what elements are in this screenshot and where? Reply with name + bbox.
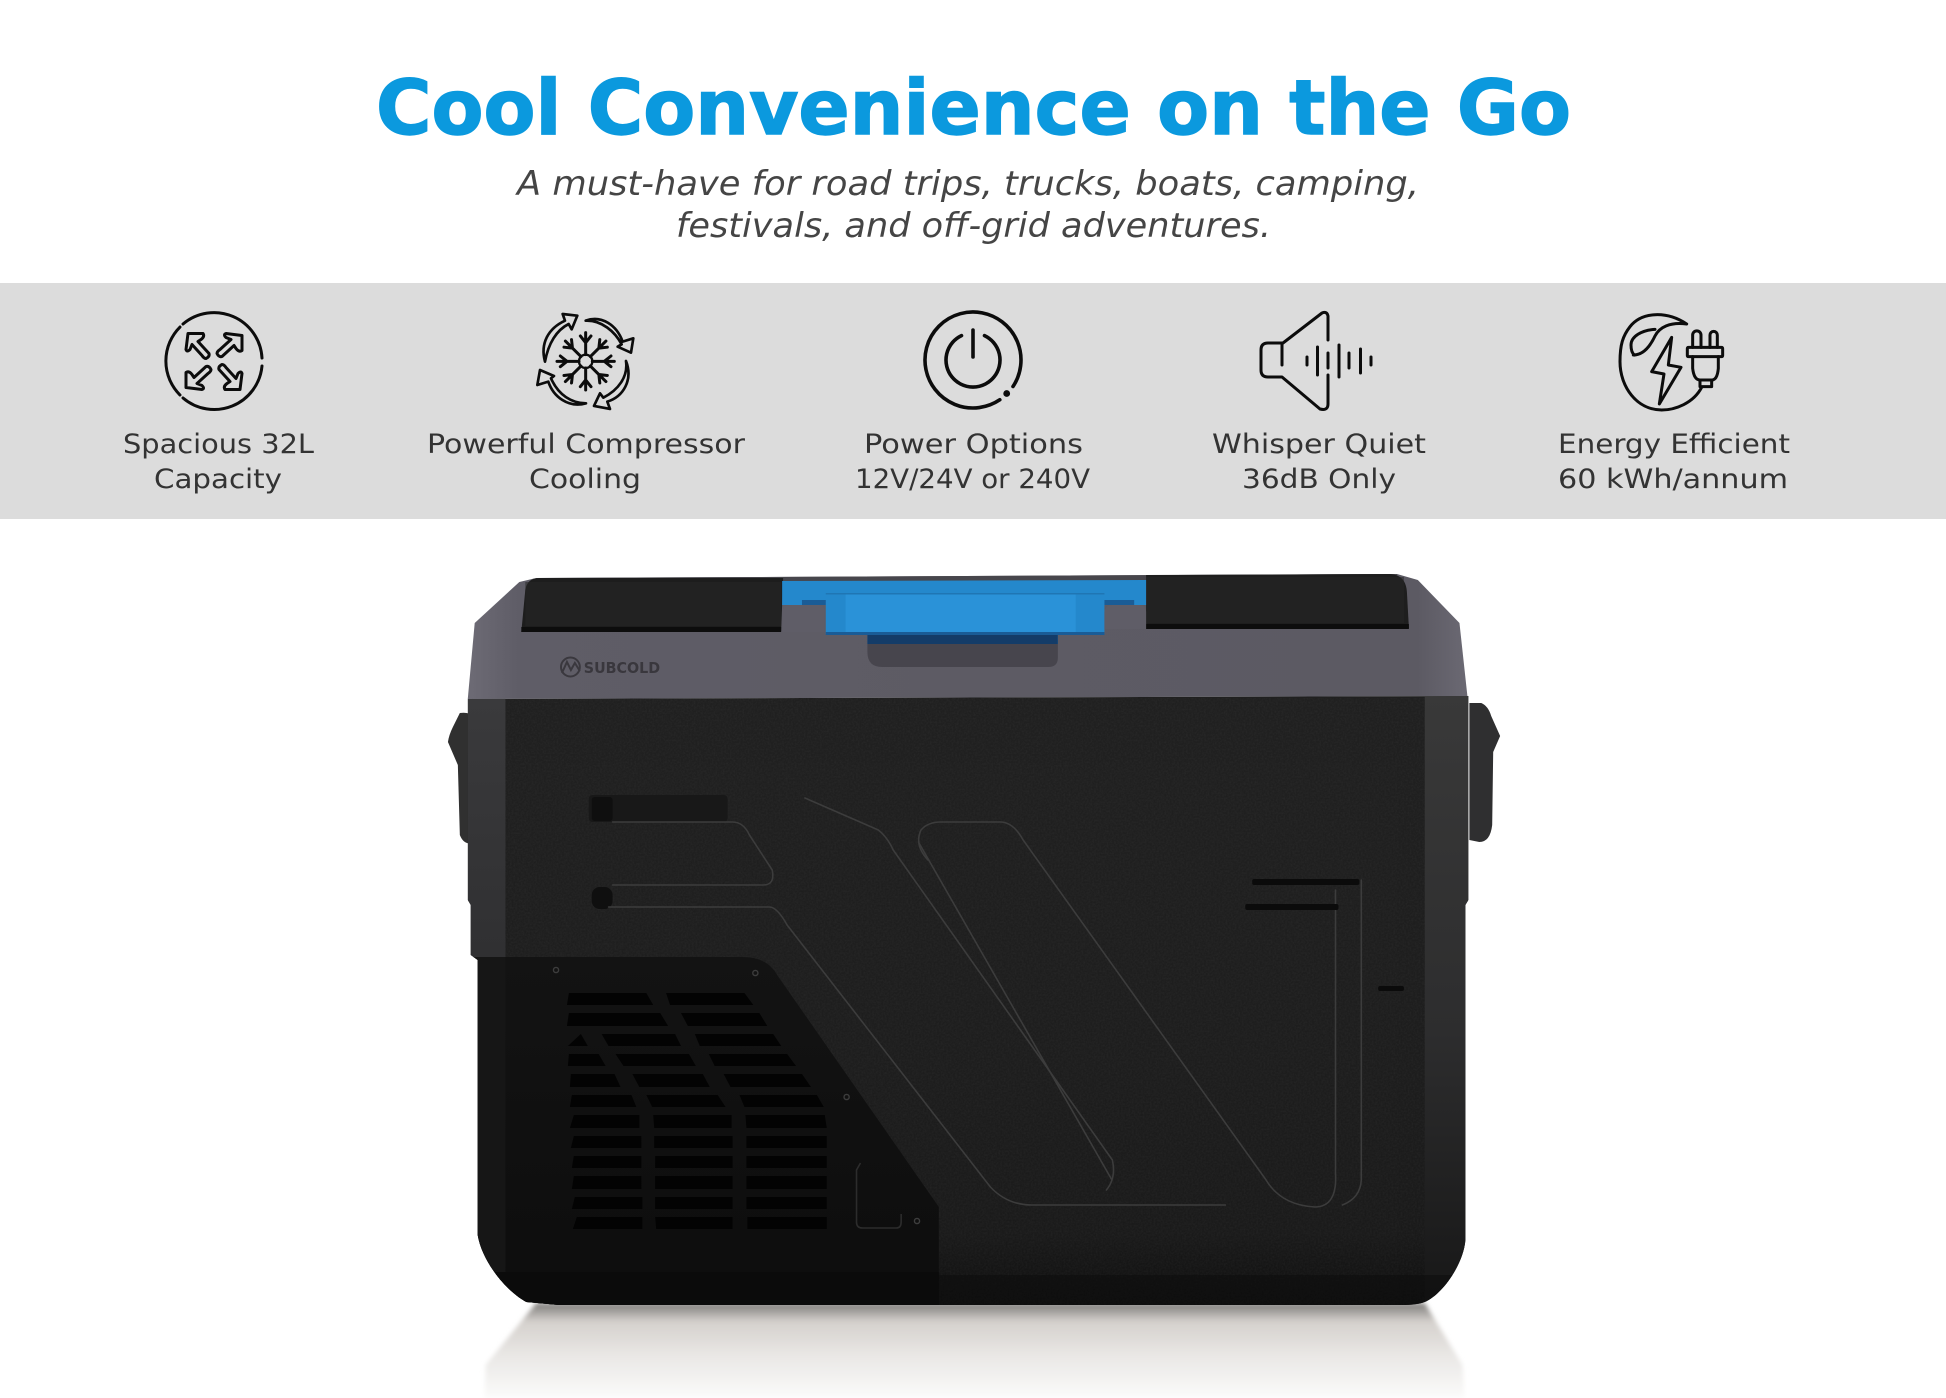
texture xyxy=(1008,1110,1352,1226)
right lid pad xyxy=(1146,574,1409,629)
lid wedges xyxy=(782,605,1146,632)
label: power options: 12V/24V or 240V xyxy=(855,464,1090,495)
vent grille xyxy=(567,993,827,1229)
bottom shade xyxy=(497,1275,1452,1305)
cooler product illustration xyxy=(448,574,1500,1310)
label: whisper quiet: 36dB Only xyxy=(1242,464,1396,495)
icon: snowflake with arrows xyxy=(537,314,633,409)
feature: whisper quiet xyxy=(1212,312,1426,495)
brand logo xyxy=(561,658,660,677)
lid pad texture xyxy=(525,577,1404,626)
feature: power options xyxy=(855,312,1090,495)
blue latch xyxy=(782,580,1146,644)
service port xyxy=(857,1163,901,1228)
side handle: right xyxy=(1469,703,1500,842)
label: capacity: Capacity xyxy=(154,464,282,495)
side handle: left xyxy=(448,713,472,843)
icon: speaker with sound wave xyxy=(1261,312,1371,409)
subtitle: festivals, and off-grid adventures. xyxy=(676,206,1271,245)
label: capacity: Spacious 32L xyxy=(123,429,314,460)
label: whisper quiet xyxy=(1212,429,1426,495)
left lid pad xyxy=(521,578,783,632)
label: capacity xyxy=(123,429,314,495)
subtitle xyxy=(515,164,1419,245)
icon: power button xyxy=(925,312,1021,408)
label: whisper quiet: Whisper Quiet xyxy=(1212,429,1426,460)
handle recess xyxy=(867,640,1058,667)
panel screws xyxy=(553,967,920,1224)
label: compressor cooling xyxy=(427,429,745,495)
label: power options xyxy=(855,429,1090,495)
label: energy efficient xyxy=(1558,429,1790,495)
feature: energy efficient xyxy=(1558,315,1790,495)
label: energy efficient: 60 kWh/annum xyxy=(1558,464,1788,495)
compressor panel xyxy=(460,957,939,1310)
reflection under cooler xyxy=(485,1303,1464,1398)
lid xyxy=(468,574,1467,699)
brand logo: SUBCOLD xyxy=(584,659,660,677)
lid pad shade xyxy=(521,624,1409,632)
icon: leaf bolt and plug xyxy=(1620,315,1723,410)
dark slots xyxy=(1245,879,1404,991)
cooler body xyxy=(460,695,1481,1310)
label: energy efficient: Energy Efficient xyxy=(1558,429,1790,460)
embossed body lines xyxy=(589,795,1361,1207)
icon: expand arrows in circle xyxy=(166,313,262,410)
panel left band xyxy=(474,957,506,1286)
label: power options: Power Options xyxy=(864,429,1083,460)
left side band xyxy=(468,698,506,957)
rear strip xyxy=(536,574,1397,584)
label: compressor cooling: Cooling xyxy=(529,464,641,495)
feature: capacity xyxy=(123,313,314,495)
right side band xyxy=(1424,696,1468,1302)
feature: compressor cooling xyxy=(427,314,745,495)
label: compressor cooling: Powerful Compressor xyxy=(427,429,745,460)
subtitle: A must-have for road trips, trucks, boats, camping, xyxy=(515,164,1419,203)
panel: feature band xyxy=(0,283,1946,519)
title: Cool Convenience on the Go xyxy=(376,63,1571,152)
